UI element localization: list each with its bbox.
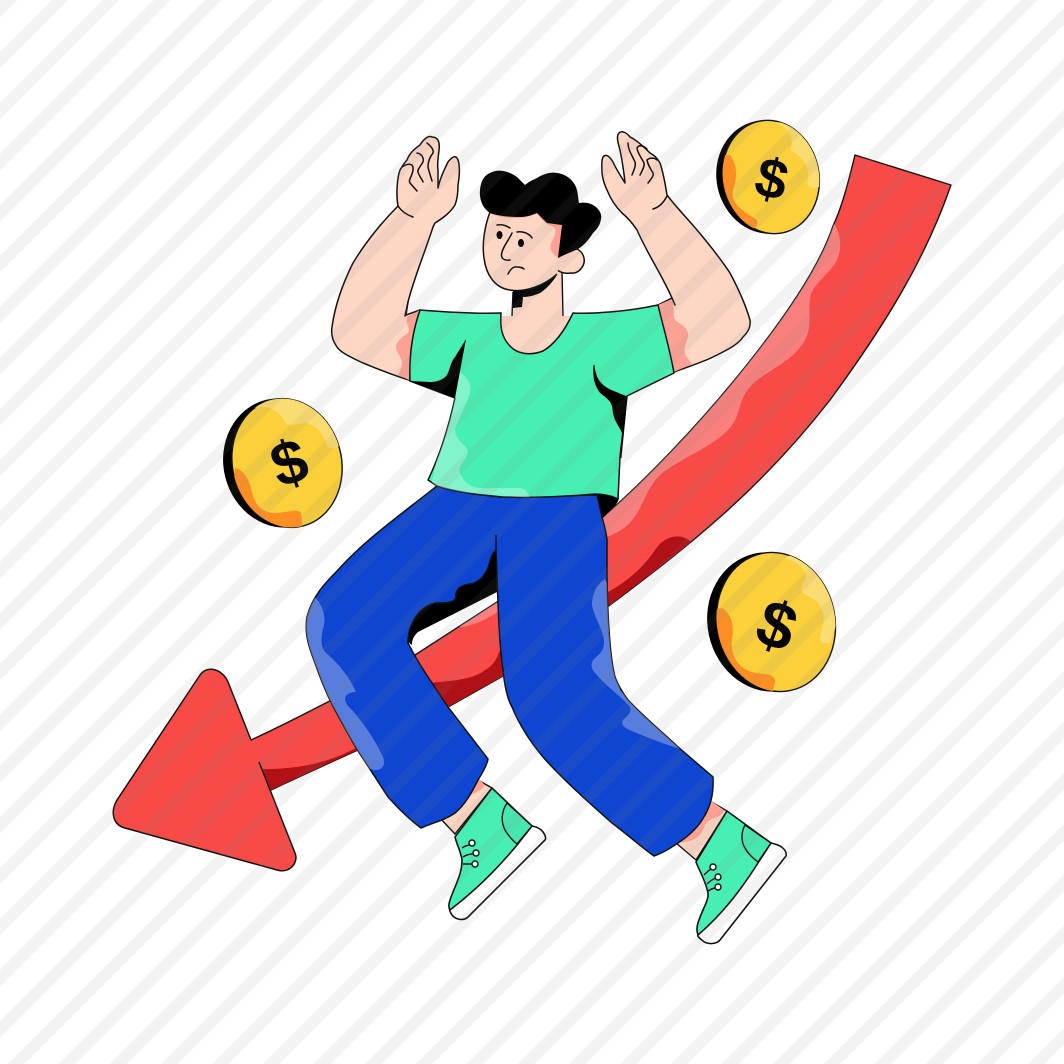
right ankle xyxy=(676,800,727,860)
arrow shaft xyxy=(235,155,951,800)
neck and chest xyxy=(501,262,575,358)
shirt xyxy=(410,305,674,499)
face xyxy=(483,205,565,291)
right shoe xyxy=(696,811,786,944)
crotch shadow xyxy=(408,548,497,645)
right arm and hand xyxy=(602,132,750,372)
left underarm shadow xyxy=(410,339,466,398)
neck shadow xyxy=(513,275,557,308)
dollar sign: $ xyxy=(749,144,795,213)
arrow: falling red trend xyxy=(113,155,951,871)
eyes xyxy=(496,231,502,239)
dollar sign: $ xyxy=(747,584,807,666)
face blush under hair xyxy=(490,208,563,258)
left arm and hand xyxy=(332,137,459,380)
ear xyxy=(557,249,584,273)
head xyxy=(480,171,601,291)
left shoe xyxy=(449,788,546,919)
coin: top right xyxy=(716,120,820,234)
eyelets xyxy=(710,864,716,870)
shirt highlight xyxy=(430,372,530,498)
character xyxy=(300,132,786,944)
eyelets xyxy=(469,840,475,846)
arrow head xyxy=(113,669,296,871)
coin: bottom right xyxy=(707,552,836,692)
hair xyxy=(480,171,601,258)
coin: left xyxy=(223,398,343,528)
right underarm shadow xyxy=(594,365,627,458)
dollar sign: $ xyxy=(262,425,317,502)
waist shadow xyxy=(595,492,619,519)
brows nose mouth xyxy=(497,225,532,274)
left ankle xyxy=(439,778,492,834)
pants xyxy=(300,486,713,856)
